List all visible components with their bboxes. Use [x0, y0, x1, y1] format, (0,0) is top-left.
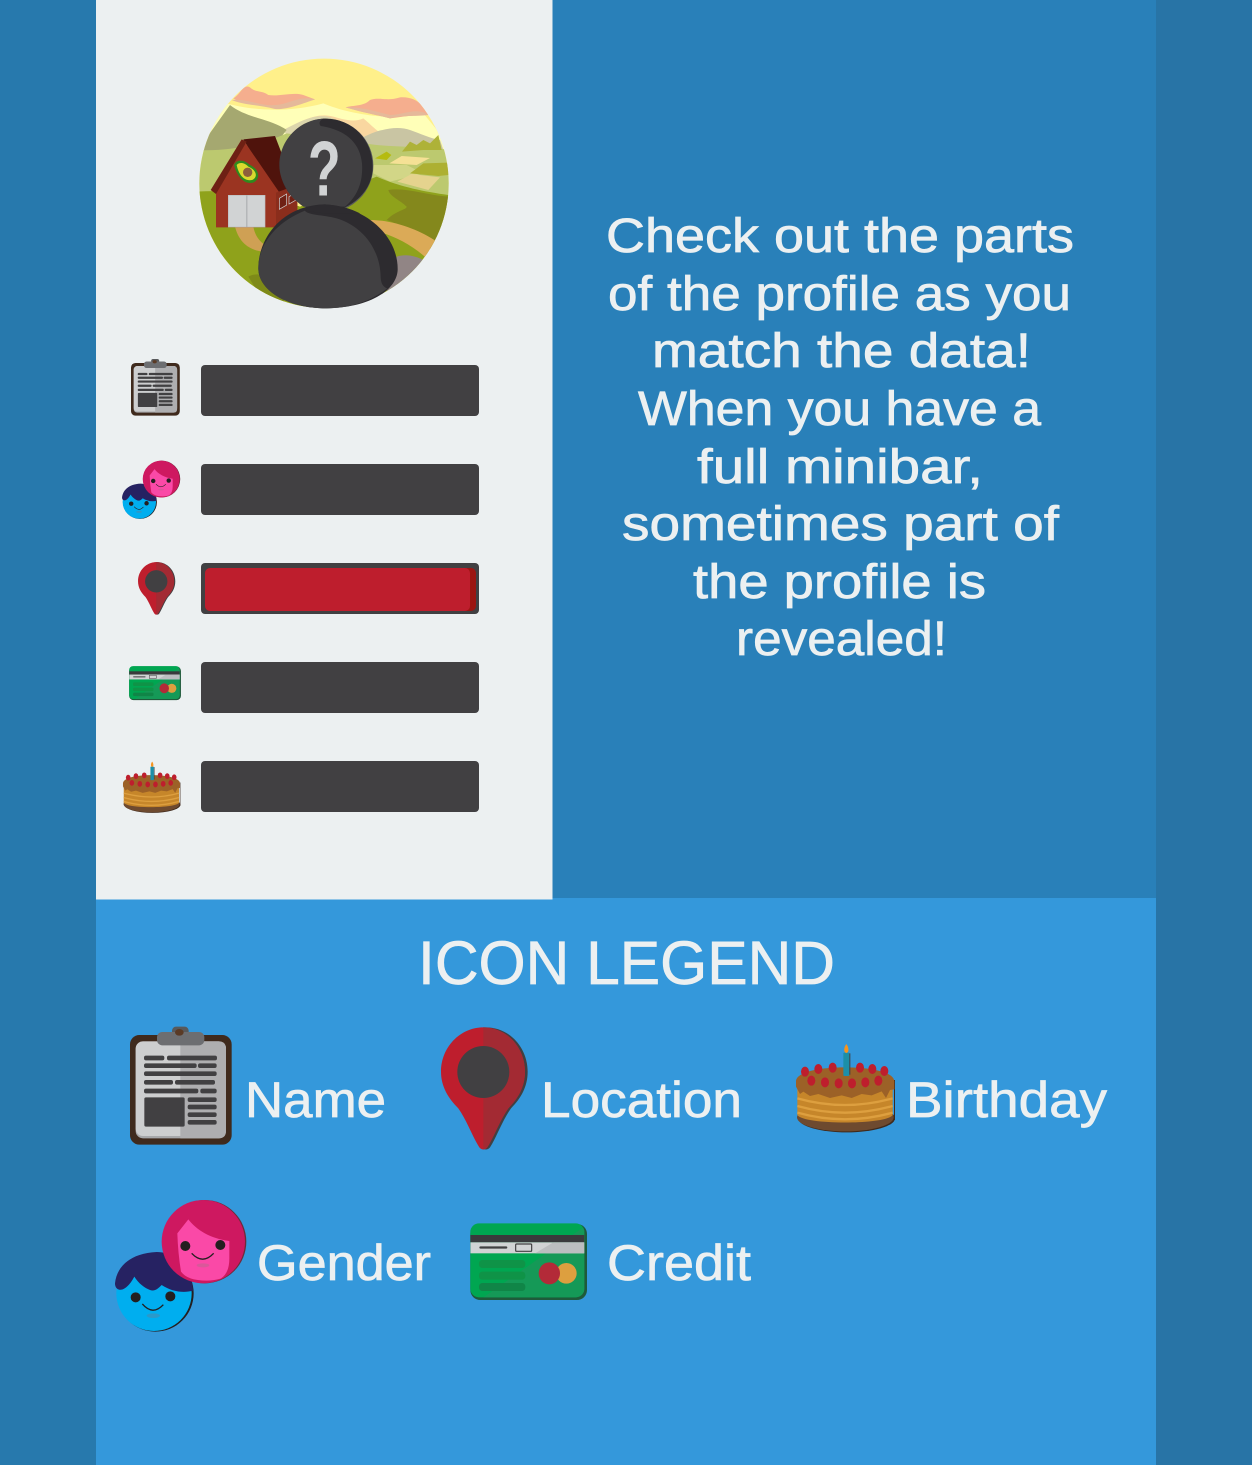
icon: pin small: [138, 562, 175, 615]
legend item: name: Name: [245, 1072, 386, 1128]
text block: instructions: sometimes part of: [622, 498, 1060, 551]
barn: [243, 136, 286, 192]
text block: instructions: of the profile as you: [608, 268, 1071, 321]
bar: birthday: [123, 761, 479, 813]
icon: clipboard small: [131, 359, 180, 416]
legend item: location: Location: [541, 1072, 742, 1128]
panel: profile: [96, 0, 552, 900]
bar: location, full: [138, 562, 479, 615]
legend item: credit: Credit: [607, 1235, 751, 1291]
icon: faces small: [122, 461, 180, 519]
legend item: gender: Gender: [257, 1235, 431, 1291]
text block: instructions: revealed!: [736, 613, 947, 666]
text block: instructions: full minibar,: [697, 441, 983, 494]
text block: instructions: match the data!: [652, 325, 1031, 378]
avatar: mystery person over farm landscape: [197, 57, 453, 317]
icon: credit card: [470, 1223, 587, 1300]
bar: gender: [122, 461, 479, 519]
bar: name: [131, 359, 479, 416]
icon: map pin: [441, 1027, 528, 1149]
icon: card small: [129, 666, 181, 700]
legend item: birthday: [796, 1044, 1107, 1132]
legend item: birthday: Birthday: [906, 1072, 1107, 1128]
legend item: name: [130, 1027, 386, 1145]
icon: cake small: [123, 762, 180, 813]
heading: ICON LEGEND: [418, 929, 835, 997]
text block: instructions: When you have a: [638, 383, 1041, 436]
icon: clipboard: [130, 1027, 232, 1145]
right side strip: [1156, 0, 1252, 1465]
icon: faces: [115, 1200, 246, 1332]
panel: icon legend: [96, 898, 1156, 1465]
icon: cake: [796, 1044, 895, 1132]
bar: credit: [129, 662, 479, 713]
legend item: credit: [470, 1223, 751, 1300]
legend item: gender: [115, 1200, 431, 1332]
person silhouette: [258, 119, 398, 308]
text block: instructions: Check out the parts: [606, 210, 1074, 263]
question mark: ?: [308, 127, 341, 213]
text block: instructions: [606, 210, 1074, 666]
legend item: location: [441, 1027, 742, 1149]
center blue panel: [96, 0, 1156, 899]
text block: instructions: the profile is: [693, 556, 986, 609]
